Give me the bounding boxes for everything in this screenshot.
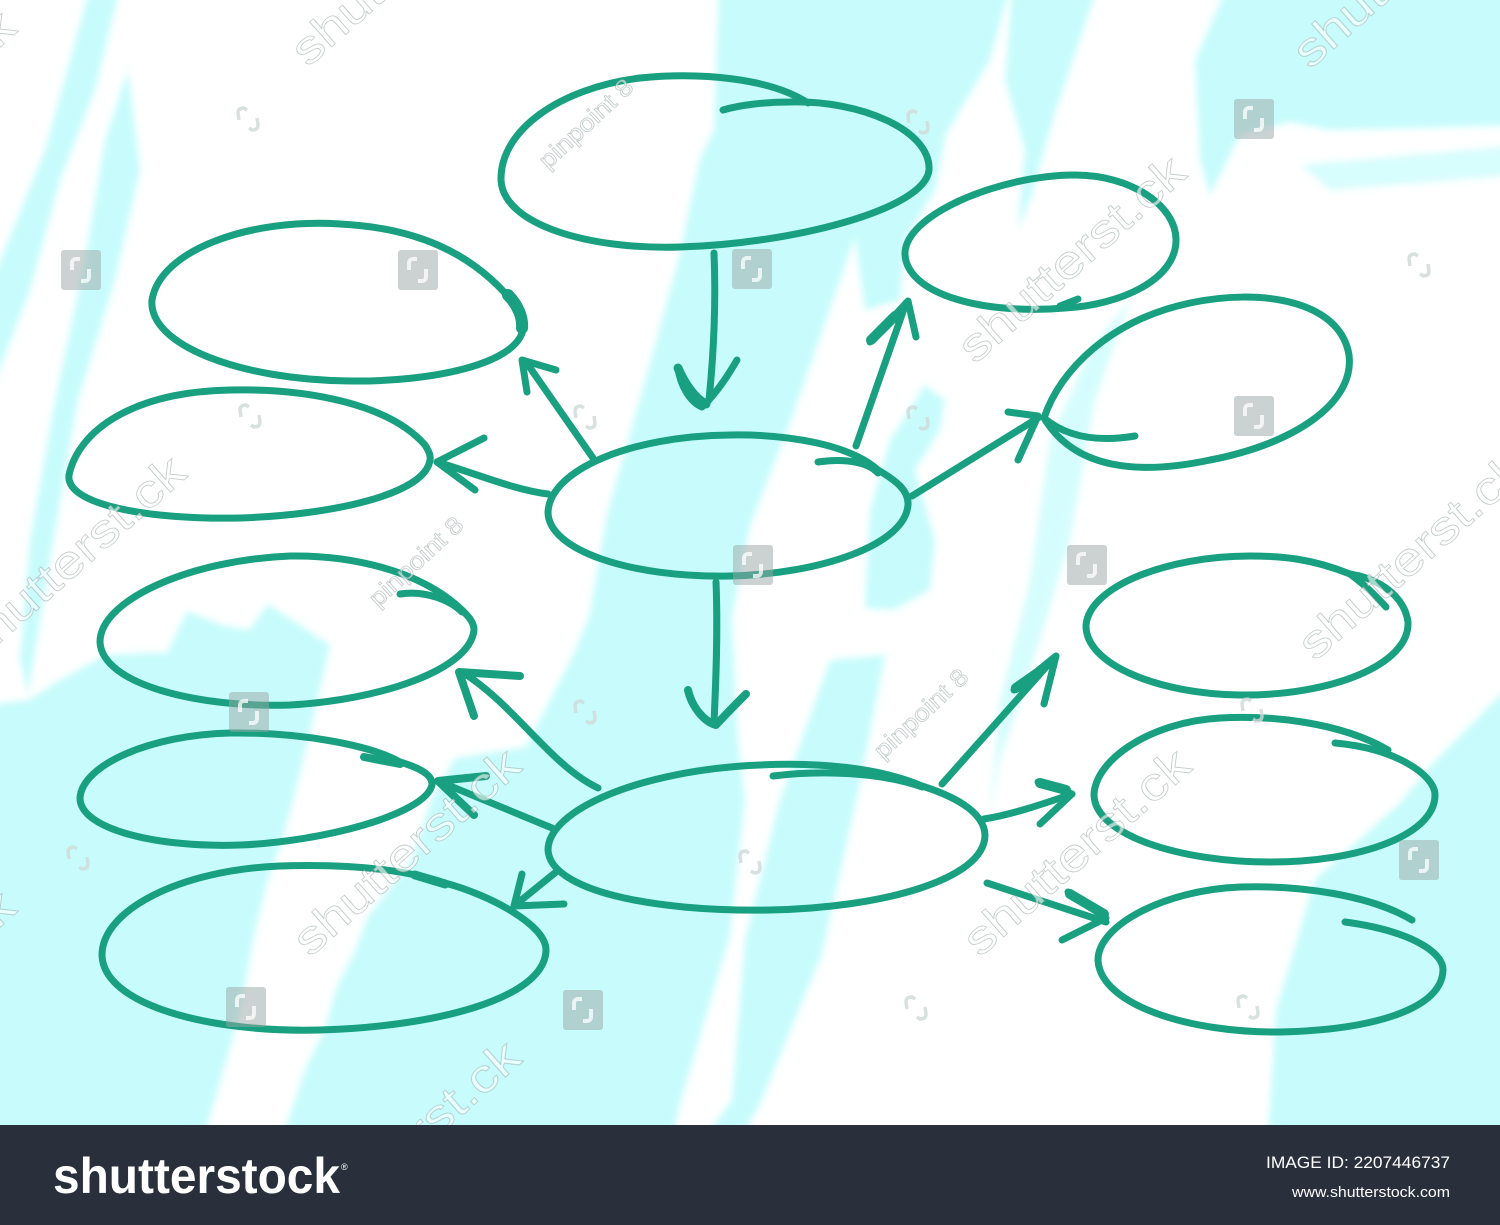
logo: registered mark: ®: [341, 1162, 348, 1172]
watermark: shutterstock text: shutterst.ck: [947, 144, 1196, 372]
mind map diagram: [69, 76, 1443, 1032]
arrow: bottom to lower left 2: [438, 776, 552, 828]
arrow: top to center: [678, 253, 737, 407]
arrow: bottom to lower left 1: [459, 672, 598, 788]
arrow: center to upper left 2: [437, 438, 548, 494]
watermark: shutterstock text: shutterst.ck: [282, 737, 531, 965]
watermark: shutterstock text: shutterst.ck: [952, 737, 1201, 965]
watermark: faint corner glyphs: [68, 108, 1429, 1019]
bubble: lower left 1: [100, 556, 474, 705]
arrow: center to upper right 1: [856, 301, 916, 446]
bubble: lower right 3: [1098, 887, 1443, 1032]
bubble: center top: [548, 435, 908, 576]
arrow: bottom to lower right 1: [942, 656, 1056, 784]
watermark: small corner glyphs: [72, 108, 1427, 1021]
bubble: upper left 1: [152, 223, 524, 381]
bubble: upper right 1: [905, 175, 1176, 309]
bubble: lower left 3: [102, 866, 546, 1030]
arrow: center to upper right 2: [912, 412, 1038, 496]
watermark: grey squares: [61, 99, 1439, 1030]
watermark: pinpoint text: pinpoint 8: [534, 73, 639, 174]
bubble: center bottom: [548, 764, 985, 910]
arrow: center to upper left 1: [522, 360, 593, 458]
bubble: upper left 2: [69, 390, 430, 518]
arrow: bottom to lower right 3: [987, 883, 1106, 940]
website: www.shutterstock.com: [1291, 1185, 1450, 1201]
bubble: lower right 1: [1086, 556, 1408, 695]
bubble: top: [501, 76, 929, 247]
arrow: bottom to lower right 2: [984, 782, 1072, 824]
watermark: pinpoint text: pinpoint 8: [869, 663, 974, 764]
logo: shutterstock: shutterstock: [53, 1148, 340, 1204]
watermark: pinpoint text: pinpoint 8: [364, 511, 469, 612]
arrow: bottom to lower left 3: [514, 872, 564, 906]
bubble: upper right 2: [1044, 297, 1349, 467]
watermark: shutterstock text: shutterst.ck: [1287, 441, 1500, 669]
arrow: center to bottom: [688, 582, 746, 725]
bubble: lower left 2: [80, 733, 432, 845]
image id: IMAGE ID: 2207446737: [1266, 1154, 1450, 1172]
watermark: pinpoint text: [364, 73, 974, 764]
bubble: lower right 2: [1094, 717, 1435, 862]
footer bar: [0, 1125, 1500, 1225]
